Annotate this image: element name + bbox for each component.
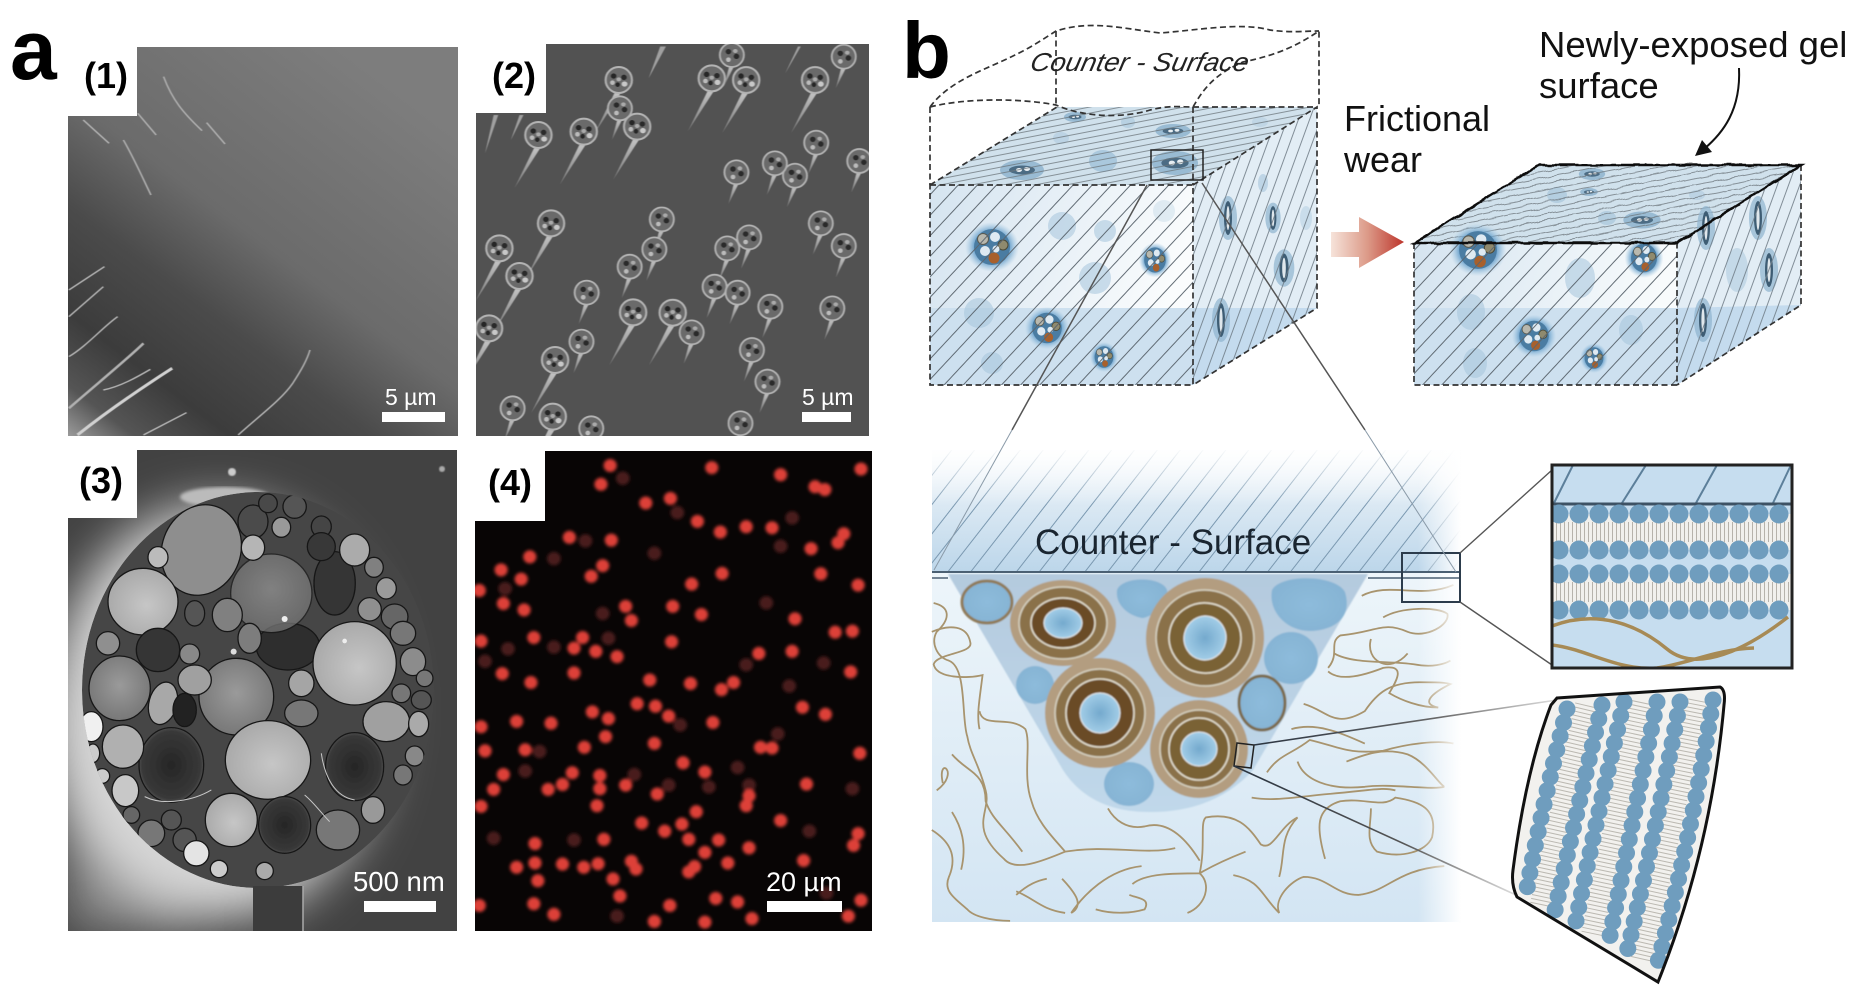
italic counter-surface label: Counter - Surface [1028, 47, 1252, 77]
rough worn top outline [1414, 165, 1801, 243]
guide lines to surface inset [1460, 470, 1552, 665]
newly-exposed gel surface label [1539, 24, 1847, 106]
cube front face [930, 185, 1193, 385]
panel 4 label box [467, 444, 545, 521]
fibre network [932, 585, 1453, 921]
right fade of panel [1418, 450, 1461, 923]
dashed cube edges [930, 107, 1317, 385]
panel 1 label box [60, 40, 137, 116]
curved arrow to exposed surface [1695, 68, 1739, 156]
worn cube front face [1414, 224, 1677, 385]
panel label a: a [10, 3, 58, 97]
panel 4 scale bar: 20 µm [766, 867, 842, 897]
worn cube top face [1414, 165, 1801, 243]
multilamellar vesicle 2 [1135, 567, 1275, 709]
counter-surface band [932, 450, 1460, 572]
panel 4 label box: (4) [488, 462, 532, 503]
inset: curved membrane stack [1512, 687, 1724, 982]
panel 3 label box: (3) [79, 460, 123, 501]
polymer strands [1552, 617, 1788, 668]
panel 1: smooth gel SEM [68, 47, 458, 436]
counter-surface lines [932, 572, 1460, 578]
surface hatch [1554, 465, 1791, 503]
panel 2 scale bar: 5 µm [802, 384, 854, 410]
vesicle-packed sphere [80, 492, 434, 888]
frictional wear label [1343, 98, 1490, 180]
panel 3 scale bar: 500 nm [353, 866, 445, 897]
simple blue vesicles [962, 578, 1347, 806]
panel 3 scale bar [353, 866, 445, 912]
panel 3 label box [60, 443, 137, 518]
detail panel: vesicle at counter-surface [932, 450, 1461, 923]
worn cube right face [1677, 165, 1801, 385]
panel 1 scale bar [382, 384, 445, 422]
right cube: after wear [1414, 165, 1801, 385]
frictional wear label: Frictional [1344, 98, 1490, 139]
newly-exposed gel surface label: Newly-exposed gel [1539, 24, 1847, 65]
panel 1 label box: (1) [84, 55, 128, 96]
arrow: frictional wear [1331, 217, 1404, 268]
inset: bilayers at surface [1552, 465, 1797, 668]
panel 3: single microgel SEM [50, 450, 457, 931]
gel body [932, 572, 1460, 922]
panel 4 scale bar [766, 867, 842, 912]
newly-exposed gel surface label: surface [1539, 65, 1659, 106]
left cube: gel with counter-surface [930, 25, 1319, 385]
panel label b: b [902, 6, 951, 95]
zoom box on vesicle membrane [1234, 743, 1254, 768]
frictional wear label: wear [1343, 139, 1422, 180]
panel 2 scale bar [802, 384, 854, 422]
zoom box on top face [1151, 150, 1203, 180]
lipid heads [1526, 700, 1713, 973]
dashed edges of worn cube [1414, 165, 1801, 385]
lipid bilayer bands [1552, 514, 1797, 610]
multilamellar vesicle 3 [1045, 658, 1155, 768]
multilamellar vesicle 4 [1150, 700, 1248, 798]
panel 2 label box: (2) [492, 55, 536, 96]
panel 2: balloon vesicle SEM [476, 44, 869, 436]
panel 2 label box [468, 37, 546, 113]
cube right face [1193, 107, 1317, 385]
stalk below sphere [253, 886, 303, 931]
V-shaped vesicle [948, 567, 1368, 812]
counter-surface label: Counter - Surface [1035, 523, 1311, 562]
guide lines to membrane inset [1234, 700, 1557, 895]
cube top face [930, 107, 1317, 185]
zoom guide lines to detail panel [934, 183, 1456, 572]
multilamellar vesicle 1 [1010, 580, 1116, 666]
panel 1 scale bar: 5 µm [385, 384, 437, 410]
lipid tails [1541, 700, 1696, 962]
panel 4: fluorescence microscopy red dots [473, 451, 872, 931]
zoom box at surface [1402, 553, 1460, 602]
counter-surface dashed box [930, 25, 1319, 115]
